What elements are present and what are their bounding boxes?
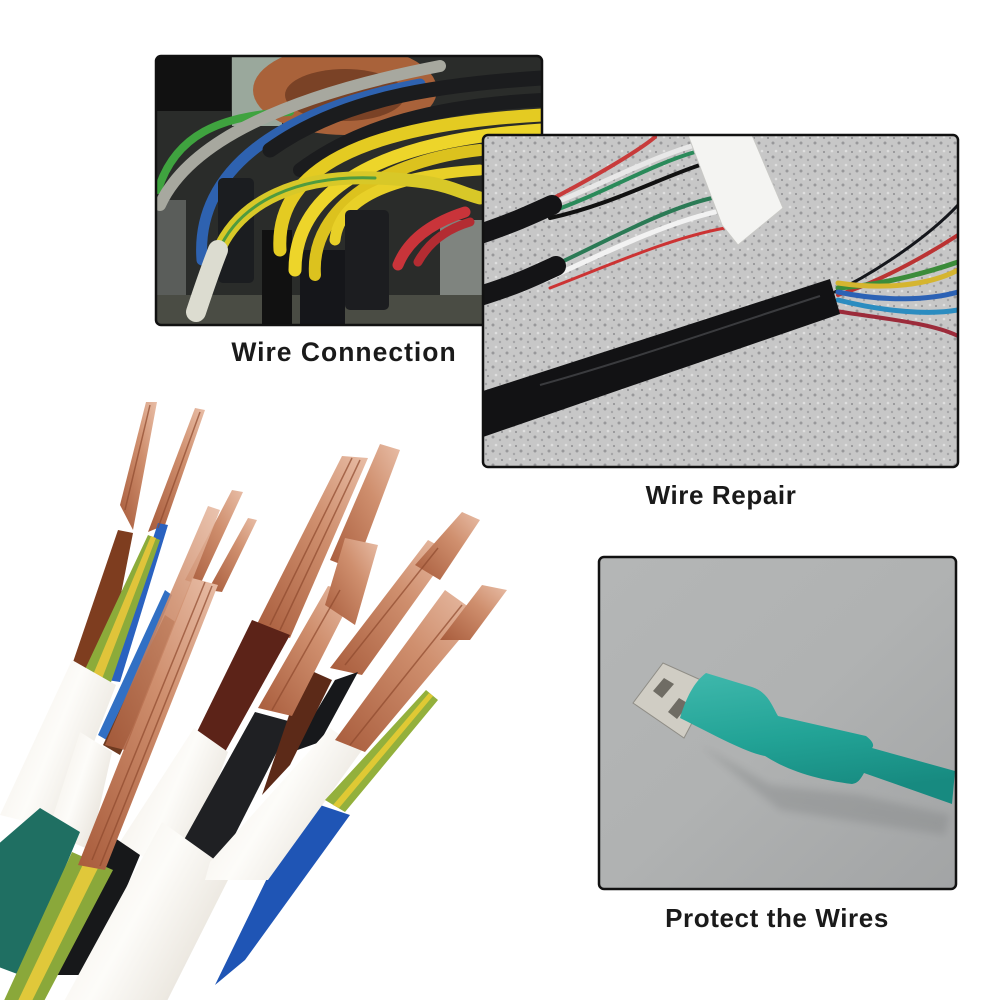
front copper bundles bbox=[258, 586, 355, 716]
green and yellow wire right bbox=[325, 690, 438, 812]
second blue and brown wires bbox=[98, 590, 172, 742]
large white cable bbox=[62, 822, 232, 1000]
dark gap bbox=[55, 838, 140, 975]
white connector bbox=[688, 135, 783, 245]
black heat shrink tube bbox=[480, 279, 840, 438]
icon: usb plug bbox=[632, 662, 700, 739]
green and yellow wire bbox=[80, 535, 160, 685]
brown wire behind black bbox=[262, 668, 332, 795]
white cable right bbox=[205, 728, 362, 880]
heading: wire connection: Wire Connection bbox=[231, 337, 457, 367]
green and yellow cable bbox=[2, 852, 113, 1000]
white sheaths bbox=[0, 660, 116, 830]
heading: protect the wires: Protect the Wires bbox=[665, 903, 889, 933]
blue wire bbox=[107, 523, 168, 682]
teal-green cable bbox=[0, 808, 80, 975]
panel: protect the wires photo bbox=[599, 557, 956, 889]
rear copper tips bbox=[120, 402, 157, 530]
heading: wire repair: Wire Repair bbox=[646, 480, 796, 510]
panel: wire connection photo bbox=[156, 45, 542, 325]
black wire bbox=[170, 712, 292, 880]
panel: wire repair photo bbox=[480, 135, 958, 467]
teal heat shrink sleeve bbox=[680, 673, 955, 804]
dark brown wire bbox=[193, 620, 290, 752]
blue cable bbox=[215, 805, 350, 985]
rear black wire bbox=[292, 672, 358, 752]
copper strands bbox=[92, 405, 462, 866]
brown wire bbox=[72, 530, 133, 675]
capacitors bbox=[218, 178, 389, 310]
illustration: stripped cable bundle bbox=[0, 402, 507, 1000]
